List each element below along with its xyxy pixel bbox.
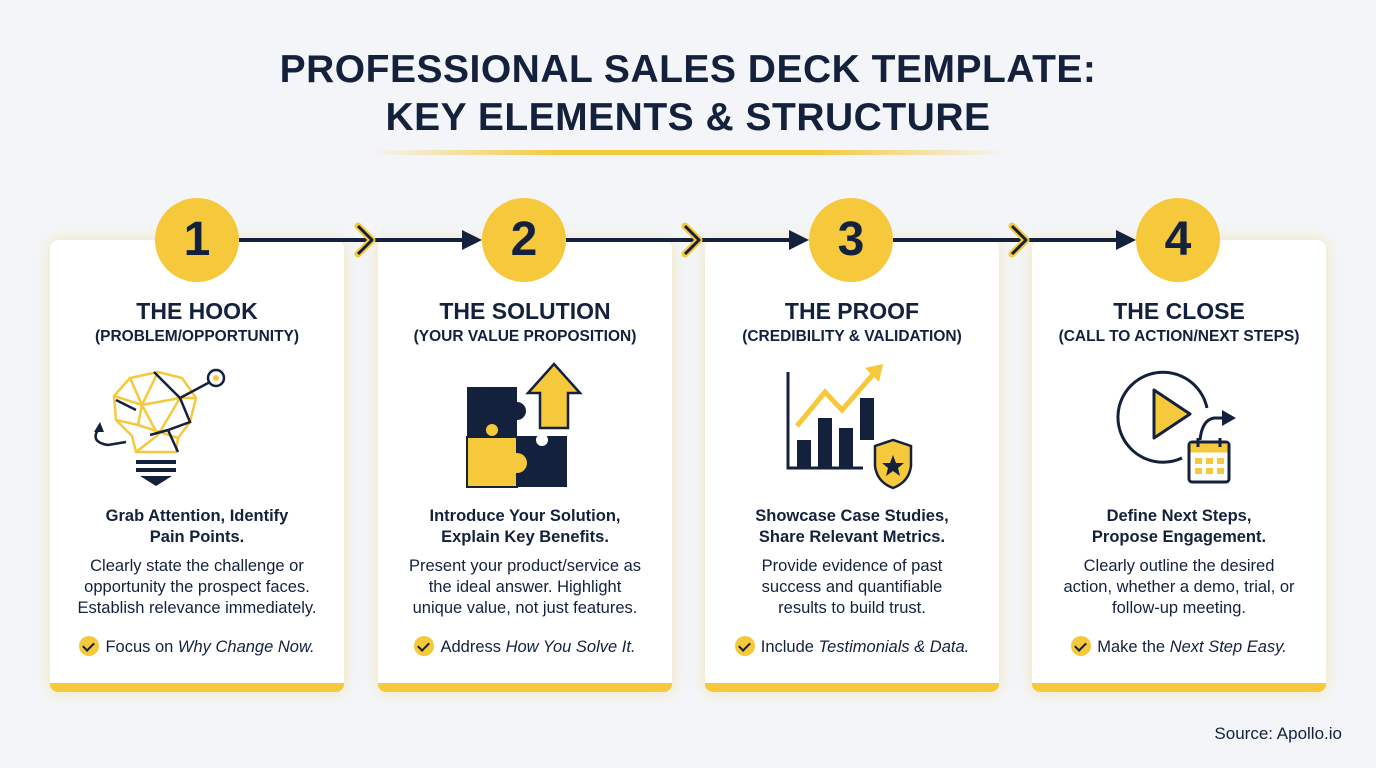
heading 4: THE CLOSE: [1113, 298, 1245, 324]
heading 2: THE SOLUTION: [439, 298, 611, 324]
subheading 2: (YOUR VALUE PROPOSITION): [414, 328, 636, 345]
bold lead 3: [755, 507, 949, 546]
check 4: Make the Next Step Easy.: [1097, 638, 1287, 656]
subheading 4: (CALL TO ACTION/NEXT STEPS): [1059, 328, 1299, 345]
card 2: [378, 240, 672, 692]
card 4: [1032, 240, 1326, 692]
card 3: [705, 240, 999, 692]
body 1: Establish relevance immediately.: [77, 599, 317, 617]
body 3: Provide evidence of past: [762, 557, 942, 575]
icon: lightbulb: [94, 368, 226, 486]
connector arrows: [239, 222, 1136, 258]
body 4: action, whether a demo, trial, or: [1063, 578, 1295, 596]
title: KEY ELEMENTS & STRUCTURE: [386, 96, 990, 139]
body 4: Clearly outline the desired: [1084, 557, 1274, 575]
icon: play and calendar: [1116, 370, 1236, 484]
step number 3: [809, 198, 893, 282]
step number 4: 4: [1165, 213, 1191, 266]
bold lead 2: Explain Key Benefits.: [441, 528, 609, 546]
bold lead 4: Propose Engagement.: [1092, 528, 1266, 546]
check 2: Address How You Solve It.: [440, 638, 636, 656]
bold lead 3: Share Relevant Metrics.: [759, 528, 945, 546]
body 2: unique value, not just features.: [413, 599, 637, 617]
subheading 1: (PROBLEM/OPPORTUNITY): [95, 328, 299, 345]
body 1: [77, 557, 317, 617]
bold lead 1: Pain Points.: [150, 528, 244, 546]
body 2: the ideal answer. Highlight: [429, 578, 621, 596]
card 1: [50, 240, 344, 692]
body 2: [409, 557, 641, 617]
icon: chart with shield: [786, 364, 912, 490]
bold lead 3: Showcase Case Studies,: [755, 507, 949, 525]
title: [280, 48, 1096, 139]
step number 1: [155, 198, 239, 282]
step number 2: [482, 198, 566, 282]
step number 4: [1136, 198, 1220, 282]
bold lead 4: [1092, 507, 1266, 546]
heading 1: THE HOOK: [136, 298, 258, 324]
body 4: [1063, 557, 1295, 617]
bold lead 4: Define Next Steps,: [1107, 507, 1251, 525]
icon: puzzle with arrow: [466, 362, 583, 488]
bold lead 2: [430, 507, 620, 546]
step number 2: 2: [511, 213, 537, 266]
subheading 3: (CREDIBILITY & VALIDATION): [742, 328, 962, 345]
title: PROFESSIONAL SALES DECK TEMPLATE:: [280, 48, 1096, 91]
source: Source: Apollo.io: [1214, 724, 1342, 743]
bold lead 2: Introduce Your Solution,: [430, 507, 620, 525]
body 4: follow-up meeting.: [1112, 599, 1246, 617]
body 2: Present your product/service as: [409, 557, 641, 575]
body 1: opportunity the prospect faces.: [84, 578, 310, 596]
body 1: Clearly state the challenge or: [90, 557, 304, 575]
bold lead 1: Grab Attention, Identify: [106, 507, 288, 525]
check 1: Focus on Why Change Now.: [105, 638, 315, 656]
heading 3: THE PROOF: [785, 298, 919, 324]
step number 1: 1: [184, 213, 210, 266]
body 3: results to build trust.: [778, 599, 926, 617]
check 3: Include Testimonials & Data.: [761, 638, 969, 656]
title underline: [370, 150, 1006, 155]
step number 3: 3: [838, 213, 864, 266]
bold lead 1: [106, 507, 288, 546]
body 3: [762, 557, 942, 617]
body 3: success and quantifiable: [762, 578, 942, 596]
